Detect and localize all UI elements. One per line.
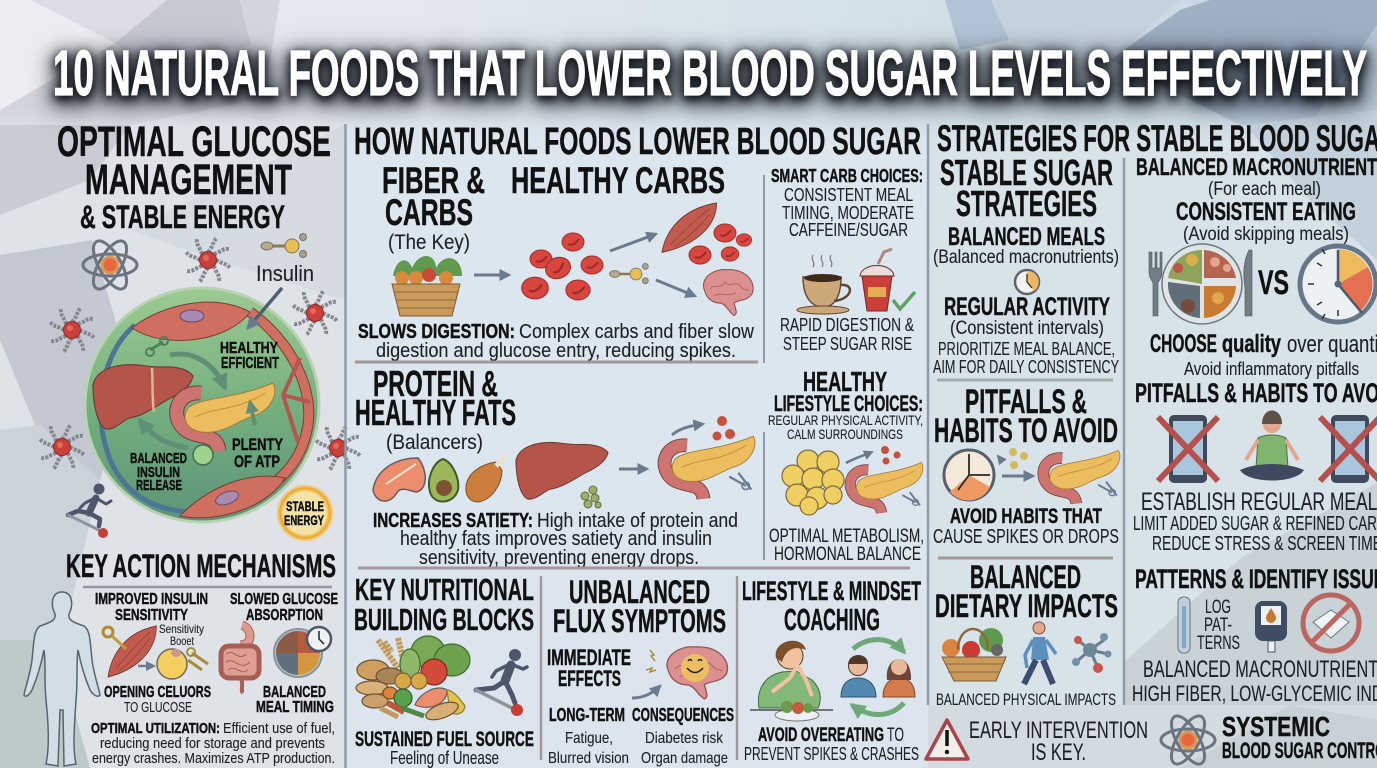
badge: stable energy: STABLE: [286, 499, 324, 514]
text: regular activity: PRIORITIZE MEAL BALANCE,: [938, 339, 1115, 359]
text: opening cells: OPENING CELUORS: [104, 684, 211, 701]
text: smart carb choices: [771, 166, 923, 240]
blue vessels: [101, 325, 270, 512]
red vessels: [240, 312, 309, 498]
icon: intestines: [221, 625, 259, 693]
heading: fiber and carbs: [382, 160, 725, 254]
arrow and droplets: [672, 416, 735, 440]
heading: lifestyle and mindset: COACHING: [784, 602, 880, 637]
icon: runner: [68, 484, 111, 538]
text: long-term consequences: [548, 705, 734, 767]
text: optimal utilization: energy crashes. Maximizes ATP production.: [92, 750, 335, 767]
text: balanced meals: (Balanced macronutrients): [933, 247, 1119, 268]
text: avoid habits: CAUSE SPIKES OR DROPS: [933, 526, 1119, 548]
text: balanced macronutrients: (For each meal): [1208, 179, 1321, 200]
icons: glucose dots and arrow: [998, 448, 1033, 476]
icon: avocado: [429, 459, 458, 502]
icon: small clock: [1015, 270, 1039, 294]
labels: HEALTHY: [220, 340, 279, 357]
icon: atom: [83, 236, 137, 294]
text: healthy lifestyle choices: CALM SURROUNDINGS: [787, 426, 903, 442]
icon: meditating person: [1240, 410, 1304, 480]
text: vs: VS: [1258, 264, 1289, 302]
arrow: cycle top: [853, 640, 904, 652]
text: log patterns: [1197, 597, 1240, 654]
icon: insulin molecule: [261, 234, 306, 258]
text: avoid habits: AVOID HABITS THAT: [950, 505, 1102, 528]
text: balanced meals: [933, 223, 1119, 268]
text: regular activity: [933, 293, 1119, 377]
text: regular activity: AIM FOR DAILY CONSISTENCY: [933, 357, 1119, 377]
text: slows digestion: Complex carbs and fiber slow: [519, 321, 754, 343]
text: slowed glucose absorption: ABSORPTION: [246, 607, 323, 624]
text: sensitivity boost label: Booet: [170, 634, 195, 648]
text: optimal utilization: OPTIMAL UTILIZATION:: [91, 720, 220, 737]
text: long-term consequences: Diabetes risk: [645, 730, 724, 747]
heading: lifestyle and mindset: [742, 576, 921, 637]
text: smart carb choices: TIMING, MODERATE: [782, 203, 914, 223]
text: choose quality: [1150, 330, 1377, 379]
labels: BALANCED: [130, 451, 187, 467]
icon: muscle with key: [103, 626, 156, 677]
icon: crossed phone two: [1320, 415, 1377, 483]
text: immediate effects: [547, 645, 631, 691]
text: increases satiety: [373, 510, 738, 569]
text: long-term consequences: Blurred vision: [548, 750, 629, 767]
text: healthy lifestyle choices: LIFESTYLE CHOICES:: [774, 391, 923, 416]
icon: pancreas: [665, 436, 755, 499]
text: balanced macronutrients: [1136, 154, 1377, 200]
icon: fat cell cluster: [782, 450, 844, 515]
labels: PLENTY: [232, 435, 284, 454]
icon: food pile: [356, 636, 470, 723]
heading: fiber and carbs: (The Key): [388, 231, 470, 254]
icon: walking person: [1024, 622, 1056, 684]
text: increases satiety: sensitivity, preventing energy drops.: [419, 547, 699, 569]
heading: protein and healthy fats: HEALTHY FATS: [355, 392, 516, 433]
text: avoid overeating: [744, 725, 919, 764]
text: early intervention: EARLY INTERVENTION: [969, 717, 1148, 744]
text: slows digestion: digestion and glucose entry, reducing spikes.: [376, 340, 736, 362]
text: sensitivity boost label: Sensitivity: [159, 622, 204, 636]
icon: man eating: [750, 641, 833, 721]
text: systemic blood sugar control: [1222, 711, 1377, 763]
mini molecule: [150, 342, 163, 350]
icon: large clock: [1300, 246, 1376, 322]
text: slows digestion: [358, 321, 754, 362]
pancreas: [177, 383, 275, 451]
labels: OF ATP: [234, 452, 280, 471]
text: balanced macronutrients low glycemic: [1132, 656, 1377, 706]
text: opening cells: TO GLUCOSE: [124, 699, 192, 716]
text: long-term consequences: LONG-TERM: [549, 705, 625, 725]
heading: optimal glucose: MANAGEMENT: [85, 156, 292, 204]
panel: key action mechanisms: [24, 548, 338, 767]
text: systemic blood sugar control: SYSTEMIC: [1222, 711, 1330, 742]
text: regular activity: (Consistent intervals): [950, 318, 1104, 339]
icon: warning triangle: [926, 720, 968, 759]
heading: balanced dietary impacts: BALANCED: [970, 559, 1081, 595]
text: optimal utilization: [91, 720, 335, 767]
icon: test strip: [1178, 597, 1190, 653]
text: balanced meal timing: BALANCED: [263, 684, 326, 701]
text: rapid digestion: [780, 315, 914, 354]
heading: how natural foods: HOW NATURAL FOODS LOWER BLOOD SUGAR: [354, 121, 921, 163]
panel: optimal glucose management: [40, 118, 360, 542]
text: log patterns: LOG: [1205, 597, 1231, 618]
badge: stable energy: ENERGY: [284, 513, 324, 528]
icon: coffee cup: [797, 255, 850, 314]
heading: stable sugar strategies: STRATEGIES: [956, 183, 1097, 224]
heading: key action mechanisms: KEY ACTION MECHANISMS: [66, 548, 336, 584]
icon: systemic atom: [1161, 711, 1215, 768]
heading: stable sugar strategies: STABLE SUGAR: [940, 152, 1113, 193]
text: balanced physical impacts: BALANCED PHYSICAL IMPACTS: [936, 690, 1116, 709]
icon: molecule: [610, 263, 648, 284]
text: early intervention: IS KEY.: [1031, 739, 1086, 766]
text: log patterns: TERNS: [1197, 633, 1240, 654]
heading: optimal glucose: & STABLE ENERGY: [80, 199, 285, 235]
text: avoid overeating: AVOID OVEREATING: [758, 725, 884, 746]
icon: pancreas small: [850, 463, 923, 513]
icon: fat cell and keys: [157, 648, 208, 679]
icon: human body: [24, 592, 100, 766]
text: improved insulin sensitivity: IMPROVED INSULIN: [95, 591, 208, 608]
arrow: [474, 274, 509, 276]
text: sustained fuel source: SUSTAINED FUEL SOURCE: [355, 728, 534, 751]
heading: pitfalls and habits: PITFALLS &: [965, 383, 1087, 421]
panel: strategies for stable blood sugar: [926, 118, 1377, 768]
icon: molecule network: [1072, 633, 1112, 673]
text: slowed glucose absorption: SLOWED GLUCOSE: [230, 591, 338, 608]
icon: chicken leg: [466, 456, 506, 502]
badge: stable energy: [276, 484, 334, 542]
heading: protein and healthy fats: (Balancers): [386, 431, 483, 454]
heading: fiber and carbs: FIBER &: [382, 160, 485, 201]
text: consistent eating: (Avoid skipping meals): [1183, 224, 1349, 245]
heading: stable sugar strategies: [940, 152, 1113, 224]
labels: [130, 340, 284, 494]
icons: red blood cells: [522, 233, 603, 300]
panel: how natural foods lower blood sugar: [354, 121, 924, 768]
icon: soda cup: [860, 249, 894, 311]
text: optimal utilization: Efficient use of fuel,: [223, 720, 335, 737]
text: consistent eating: [1176, 198, 1356, 245]
arrow to pancreas: [619, 468, 647, 470]
arrow: cycle bottom: [852, 703, 904, 715]
text: improved insulin sensitivity: SENSITIVITY: [115, 607, 188, 624]
arrow down: [656, 280, 695, 296]
text: smart carb choices: CAFFEINE/SUGAR: [789, 220, 908, 240]
text: healthy lifestyle choices: [768, 366, 923, 442]
icon: pancreas: [1043, 450, 1120, 503]
heading: balanced dietary impacts: DIETARY IMPACTS: [935, 588, 1118, 624]
heading: pitfalls and habits: [934, 383, 1118, 450]
text: avoid overeating: PREVENT SPIKES & CRASHES: [744, 744, 919, 764]
icon: smiling brain: [646, 647, 727, 699]
labels: EFFICIENT: [221, 355, 279, 372]
heading: optimal glucose: [57, 118, 331, 235]
text: regular activity: REGULAR ACTIVITY: [944, 293, 1110, 321]
heading: fiber and carbs: CARBS: [385, 192, 473, 233]
icon: crossed phone: [1158, 415, 1218, 483]
icon: cell cluster: [581, 486, 601, 508]
text: long-term consequences: CONSEQUENCES: [632, 705, 734, 725]
icon: plate and clock: [274, 627, 331, 677]
icon: food basket: [942, 628, 1006, 681]
text: sustained fuel source: Feeling of Unease: [390, 748, 499, 768]
icon: fork: [1149, 252, 1162, 316]
text: rapid digestion: RAPID DIGESTION &: [780, 315, 914, 335]
text: sensitivity boost label: [159, 622, 204, 648]
text: balanced meal timing: [256, 684, 334, 716]
icon: brain: [703, 270, 753, 316]
icon: glucose meter: [1255, 601, 1287, 652]
text: healthy lifestyle choices: HEALTHY: [803, 366, 887, 397]
text: slowed glucose absorption: [230, 591, 338, 624]
text: opening cells: [104, 684, 211, 716]
heading: lifestyle and mindset: LIFESTYLE & MINDSET: [742, 576, 921, 606]
diagram: metabolic circle: [85, 288, 319, 522]
icon: salmon: [373, 458, 425, 501]
heading: protein and healthy fats: PROTEIN &: [373, 363, 498, 404]
label: insulin: Insulin: [256, 261, 314, 286]
icon: person orange: [883, 659, 915, 697]
icon: vegetable basket: [392, 256, 462, 316]
text: optimal utilization: reducing need for storage and prevents: [100, 735, 325, 752]
text: increases satiety: healthy fats improves satiety and insulin: [400, 528, 712, 550]
flow arrows: [170, 354, 225, 388]
text: increases satiety: INCREASES SATIETY:: [373, 510, 533, 532]
arrow up: [610, 234, 656, 251]
text: optimal metabolism: [769, 526, 924, 565]
icon: liver: [516, 442, 608, 499]
text: choose quality: quality: [1222, 330, 1281, 358]
arrow: insulin to circle: [248, 288, 282, 328]
heading: key nutritional building blocks: [354, 572, 534, 637]
icon: person blue: [841, 655, 876, 697]
text: rapid digestion: STEEP SUGAR RISE: [783, 334, 912, 354]
icon: orange clock: [944, 450, 994, 501]
icon: plate: [1162, 244, 1242, 324]
heading: balanced dietary impacts: [935, 559, 1118, 624]
heading: key nutritional building blocks: KEY NUTRITIONAL: [355, 572, 534, 607]
text: sustained fuel source: [355, 728, 534, 768]
text: slows digestion: SLOWS DIGESTION:: [358, 321, 515, 343]
text: immediate effects: EFFECTS: [558, 666, 621, 691]
arrow to brain: [632, 686, 660, 698]
arrow: [138, 665, 154, 667]
text: early intervention: [969, 717, 1148, 766]
heading: unbalanced flux symptoms: FLUX SYMPTOMS: [553, 603, 726, 639]
text: choose quality: CHOOSE: [1150, 330, 1217, 358]
heading: protein and healthy fats: [355, 363, 516, 454]
labels: RELEASE: [136, 478, 182, 494]
text: avoid habits: [933, 505, 1119, 548]
arrow and droplets small: [846, 446, 900, 464]
labels: INSULIN: [137, 465, 180, 481]
green timer: [193, 445, 213, 465]
text: long-term consequences: Organ damage: [641, 750, 728, 767]
heading: optimal glucose: OPTIMAL GLUCOSE: [57, 118, 331, 166]
heading: pitfalls and habits: HABITS TO AVOID: [934, 412, 1118, 450]
text: optimal metabolism: HORMONAL BALANCE: [774, 544, 921, 565]
icon: runner with ball: [476, 649, 527, 716]
text: avoid overeating: TO: [887, 725, 904, 746]
text: log patterns: PAT-: [1204, 615, 1232, 636]
icons: floating viruses: [40, 238, 360, 470]
text: improved insulin sensitivity: [95, 591, 208, 624]
text: healthy lifestyle choices: REGULAR PHYSICAL ACTIVITY,: [768, 412, 923, 428]
icon: check mark: [893, 292, 915, 309]
text: establish regular meals: [1133, 488, 1377, 555]
text: optimal metabolism: OPTIMAL METABOLISM,: [769, 526, 924, 547]
bottom muscle: [180, 476, 285, 518]
text: balanced meal timing: MEAL TIMING: [256, 699, 334, 716]
heading: key nutritional building blocks: BUILDING BLOCKS: [354, 602, 534, 637]
text: long-term consequences: Fatigue,: [565, 730, 613, 747]
heading: unbalanced flux symptoms: [553, 574, 726, 639]
text: smart carb choices: CONSISTENT MEAL: [784, 185, 913, 205]
heading: unbalanced flux symptoms: UNBALANCED: [569, 574, 710, 610]
icon: muscle: [662, 203, 717, 252]
heading: fiber and carbs: HEALTHY CARBS: [511, 160, 725, 201]
liver: [93, 365, 193, 429]
text: smart carb choices: SMART CARB CHOICES:: [771, 166, 923, 186]
icons: red cells right: [689, 224, 752, 264]
icon: no sugar sign: [1303, 595, 1359, 651]
text: balanced meals: BALANCED MEALS: [948, 223, 1105, 251]
text: increases satiety: High intake of protein and: [537, 510, 738, 532]
top muscle: [132, 302, 250, 341]
text: immediate effects: IMMEDIATE: [547, 645, 631, 670]
icon: knife: [1244, 250, 1252, 316]
